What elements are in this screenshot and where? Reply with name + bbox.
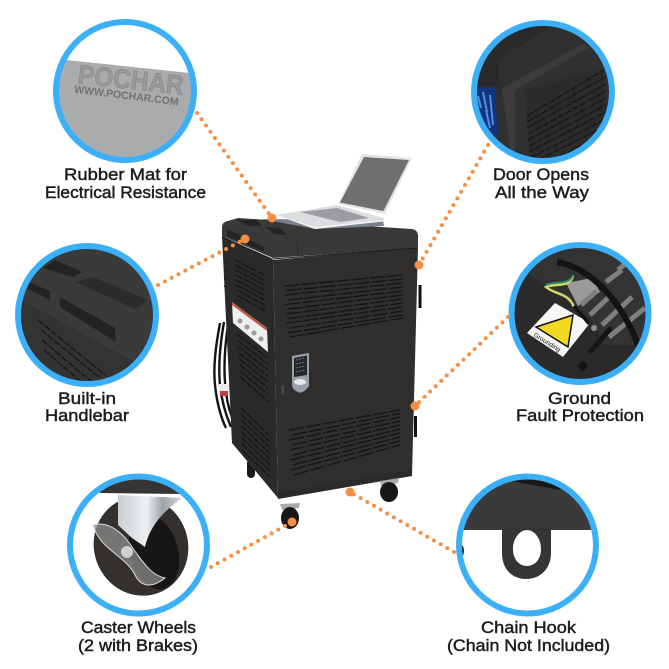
wheel xyxy=(94,502,188,596)
panel: ground fault: Grounding xyxy=(532,332,562,354)
connector: door xyxy=(414,145,488,270)
brake lever xyxy=(93,524,165,585)
connector: rubber mat xyxy=(197,113,276,222)
grey slats xyxy=(581,258,645,337)
hook loop xyxy=(502,528,551,579)
label: ground: Ground xyxy=(548,389,611,408)
side panel xyxy=(222,236,278,498)
warning label xyxy=(232,302,268,352)
top plate xyxy=(100,480,180,494)
bottom frame xyxy=(278,470,412,499)
label: rubber mat: Electrical Resistance xyxy=(45,183,206,202)
handle slots xyxy=(227,220,287,252)
label: chain hook: (Chain Not Included) xyxy=(447,636,610,655)
panel: chain hook xyxy=(455,472,605,622)
label: caster: (2 with Brakes) xyxy=(78,636,198,655)
connector: handlebar xyxy=(158,234,250,285)
hinges xyxy=(414,285,422,437)
door vent panel xyxy=(525,68,608,165)
panel: rubber mat xyxy=(50,22,200,170)
connector: chain hook xyxy=(346,488,454,552)
label: handlebar: Built-in xyxy=(58,389,116,408)
label: chain hook xyxy=(447,618,610,655)
charging cart xyxy=(214,154,422,529)
connector: ground xyxy=(410,317,508,410)
bracket xyxy=(118,495,182,547)
panel: handlebar xyxy=(12,240,162,390)
blue interior stripe xyxy=(477,87,498,138)
label: caster: Caster Wheels xyxy=(81,618,196,637)
mat embossed logo: POCHAR xyxy=(77,60,185,101)
label: door xyxy=(493,165,590,202)
label: door: All the Way xyxy=(495,183,590,202)
wire xyxy=(546,276,574,307)
label: rubber mat xyxy=(45,165,206,202)
label: handlebar: Handlebar xyxy=(45,406,129,425)
label: chain hook: Chain Hook xyxy=(481,618,577,637)
rubber mat on top xyxy=(262,219,384,229)
label: handlebar xyxy=(45,389,129,425)
front right caster xyxy=(380,478,399,502)
mat photo xyxy=(59,60,191,157)
label: ground xyxy=(516,389,644,425)
panel: door xyxy=(470,18,620,168)
label: rubber mat: Rubber Mat for xyxy=(64,165,187,184)
connector: caster xyxy=(211,518,296,567)
power cables xyxy=(214,322,235,428)
front vents lower xyxy=(289,410,400,475)
mat embossed url: WWW.POCHAR.COM xyxy=(74,84,179,108)
cable xyxy=(557,262,638,345)
back caster xyxy=(247,462,255,478)
panel: ground fault xyxy=(505,240,655,390)
laptop xyxy=(276,154,412,229)
label: door: Door Opens xyxy=(493,165,589,184)
keypad lock xyxy=(282,353,309,395)
label: caster xyxy=(78,618,198,655)
side vents xyxy=(224,260,270,477)
panel: caster xyxy=(67,474,210,616)
handlebar vents xyxy=(21,314,106,381)
front left caster xyxy=(280,503,300,529)
lid xyxy=(222,218,418,258)
label: ground: Fault Protection xyxy=(516,406,644,425)
front vents upper xyxy=(285,275,403,337)
front panel xyxy=(273,247,418,498)
grounding label xyxy=(527,303,590,357)
